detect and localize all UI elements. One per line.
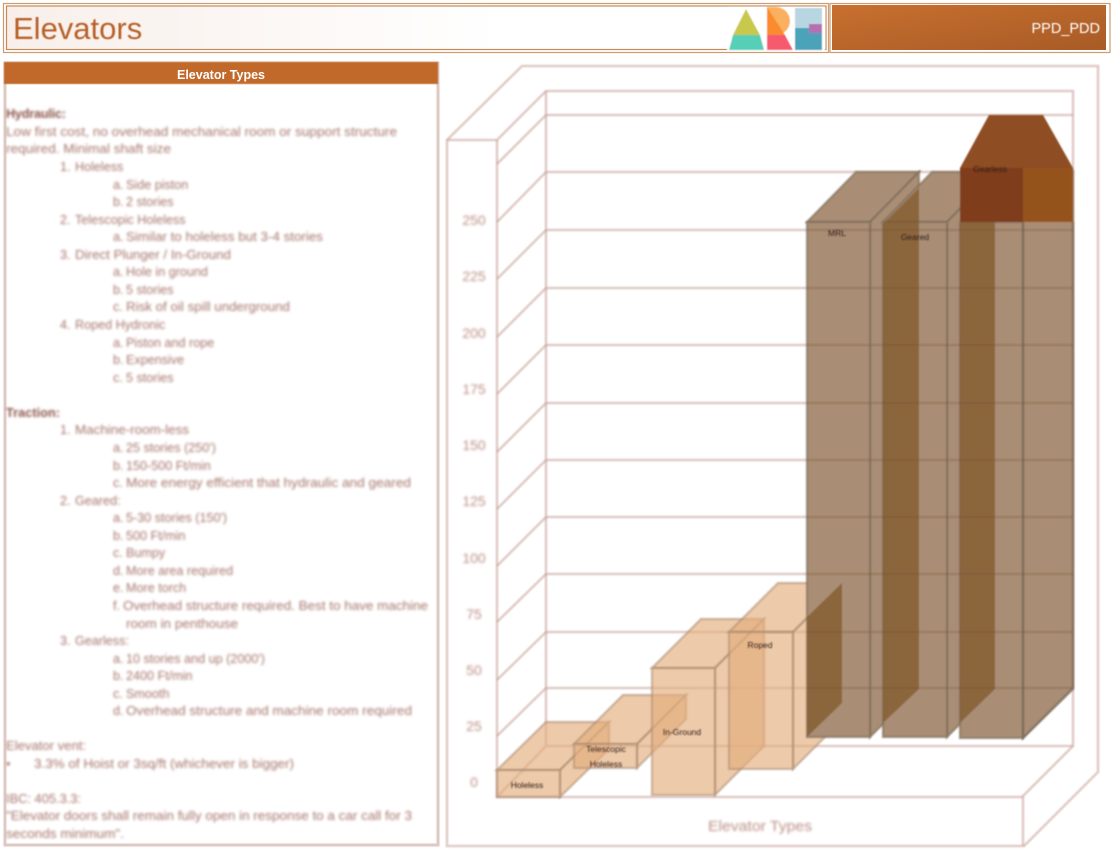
notes text: Risk of oil spill underground [126,300,290,314]
bars [497,115,1073,797]
y-axis values: 0 [470,774,478,790]
bar: Roped [729,583,842,769]
title banner [4,4,828,52]
notes text: Expensive [126,353,184,367]
notes text: room in penthouse [126,617,238,631]
notes text: b. [113,669,124,683]
notes text: Geared: [75,494,121,508]
notes text: 2. [60,494,71,508]
bar labels: Geared [901,232,929,242]
notes text: 25 stories (250') [126,441,216,455]
bar: In-Ground [652,619,764,795]
notes text: a. [113,336,124,350]
notes text: Bumpy [126,546,166,560]
notes text: Overhead structure required. Best to have machine [123,599,428,613]
y-axis values [462,212,486,790]
axis title: Elevator Types [708,818,812,835]
notes text: Machine-room-less [75,423,189,437]
notes text: b. [113,459,124,473]
notes text: c. [113,687,123,701]
notes text: 2400 Ft/min [126,669,192,683]
title: Elevators [13,11,142,46]
bar: Telescopic Holeless [574,695,686,768]
notes text: More torch [126,581,186,595]
notes text: seconds minimum". [6,827,124,841]
notes text: Low first cost, no overhead mechanical room or support structure [6,125,397,139]
notes text: d. [113,564,124,578]
bar labels: Holeless [511,780,543,790]
notes text: 10 stories and up (2000') [126,652,265,666]
bar labels: In-Ground [663,727,701,737]
notes text: IBC: 405.3.3: [6,792,81,806]
notes text: 5 stories [126,283,174,297]
notes text: Hydraulic: [6,107,66,121]
y-axis values: 175 [462,381,486,397]
y-axis values: 150 [462,437,486,453]
notes text: • [6,757,10,771]
notes text: Telescopic Holeless [75,213,186,227]
bar: Holeless [497,722,609,797]
notes text: Side piston [126,178,188,192]
bar: Gearless [960,115,1073,738]
notes text: c. [113,300,123,314]
notes text: 5-30 stories (150') [126,511,227,525]
notes text: a. [113,441,124,455]
notes text: e. [113,581,124,595]
notes text: Gearless: [75,634,129,648]
course code: PPD_PDD [1032,21,1100,37]
notes text: Roped Hydronic [75,318,165,332]
notes text: a. [113,178,124,192]
notes text: Hole in ground [126,265,208,279]
chart frame [447,66,1098,846]
notes text: c. [113,371,123,385]
notes text: b. [113,353,124,367]
notes text: 2. [60,213,71,227]
notes text: More area required [126,564,233,578]
notes text: 5 stories [126,371,174,385]
y-axis values: 100 [462,550,486,566]
y-axis values: 200 [462,325,486,341]
panel heading: Elevator Types [177,68,265,82]
notes text: Overhead structure and machine room required [126,704,412,718]
bar labels [511,164,1007,790]
notes text: Smooth [126,687,169,701]
notes text: Traction: [6,406,60,420]
notes text: 500 Ft/min [126,529,186,543]
panel: elevator types notes [4,62,438,845]
notes text: Direct Plunger / In-Ground [75,248,231,262]
3D bar chart: elevator types [447,66,1098,846]
notes text: "Elevator doors shall remain fully open in response to a car call for 3 [6,809,412,823]
notes text: b. [113,195,124,209]
y-axis values: 25 [466,718,482,734]
logo: ARE [727,7,825,51]
y-axis values: 50 [466,662,482,678]
course code banner [830,4,1110,52]
notes text: 3. [60,248,71,262]
notes text: a. [113,230,124,244]
y-axis values: 250 [462,212,486,228]
notes text: 150-500 Ft/min [126,459,211,473]
notes text: 3.3% of Hoist or 3sq/ft (whichever is bigger) [34,757,294,771]
y-axis values: 225 [462,268,486,284]
gridlines seen through bars [807,230,1073,688]
notes text: a. [113,265,124,279]
notes text: required. Minimal shaft size [6,142,171,156]
notes text: 2 stories [126,195,174,209]
notes text: c. [113,476,123,490]
bar: MRL [807,172,919,737]
notes text [6,107,428,841]
notes text: 4. [60,318,71,332]
bar labels: Telescopic [586,744,627,754]
bar labels: Gearless [973,164,1007,174]
notes text: f. [113,599,120,613]
notes text: Holeless [75,160,123,174]
notes text: Piston and rope [126,336,214,350]
notes text: a. [113,652,124,666]
bar labels: MRL [828,228,846,238]
notes text: More energy efficient that hydraulic and geared [126,476,411,490]
notes text: 1. [60,423,71,437]
notes text: Elevator vent: [6,739,86,753]
notes text: b. [113,283,124,297]
notes text: 3. [60,634,71,648]
bar labels: Holeless [590,759,622,769]
notes text: a. [113,511,124,525]
bar labels: Roped [747,640,773,650]
notes text: c. [113,546,123,560]
notes text: d. [113,704,124,718]
bar: Geared [883,172,996,737]
panel heading [4,62,438,84]
y-axis values: 125 [462,493,486,509]
notes text: 1. [60,160,71,174]
notes text: Similar to holeless but 3-4 stories [126,230,323,244]
y-axis values: 75 [466,606,482,622]
notes text: b. [113,529,124,543]
